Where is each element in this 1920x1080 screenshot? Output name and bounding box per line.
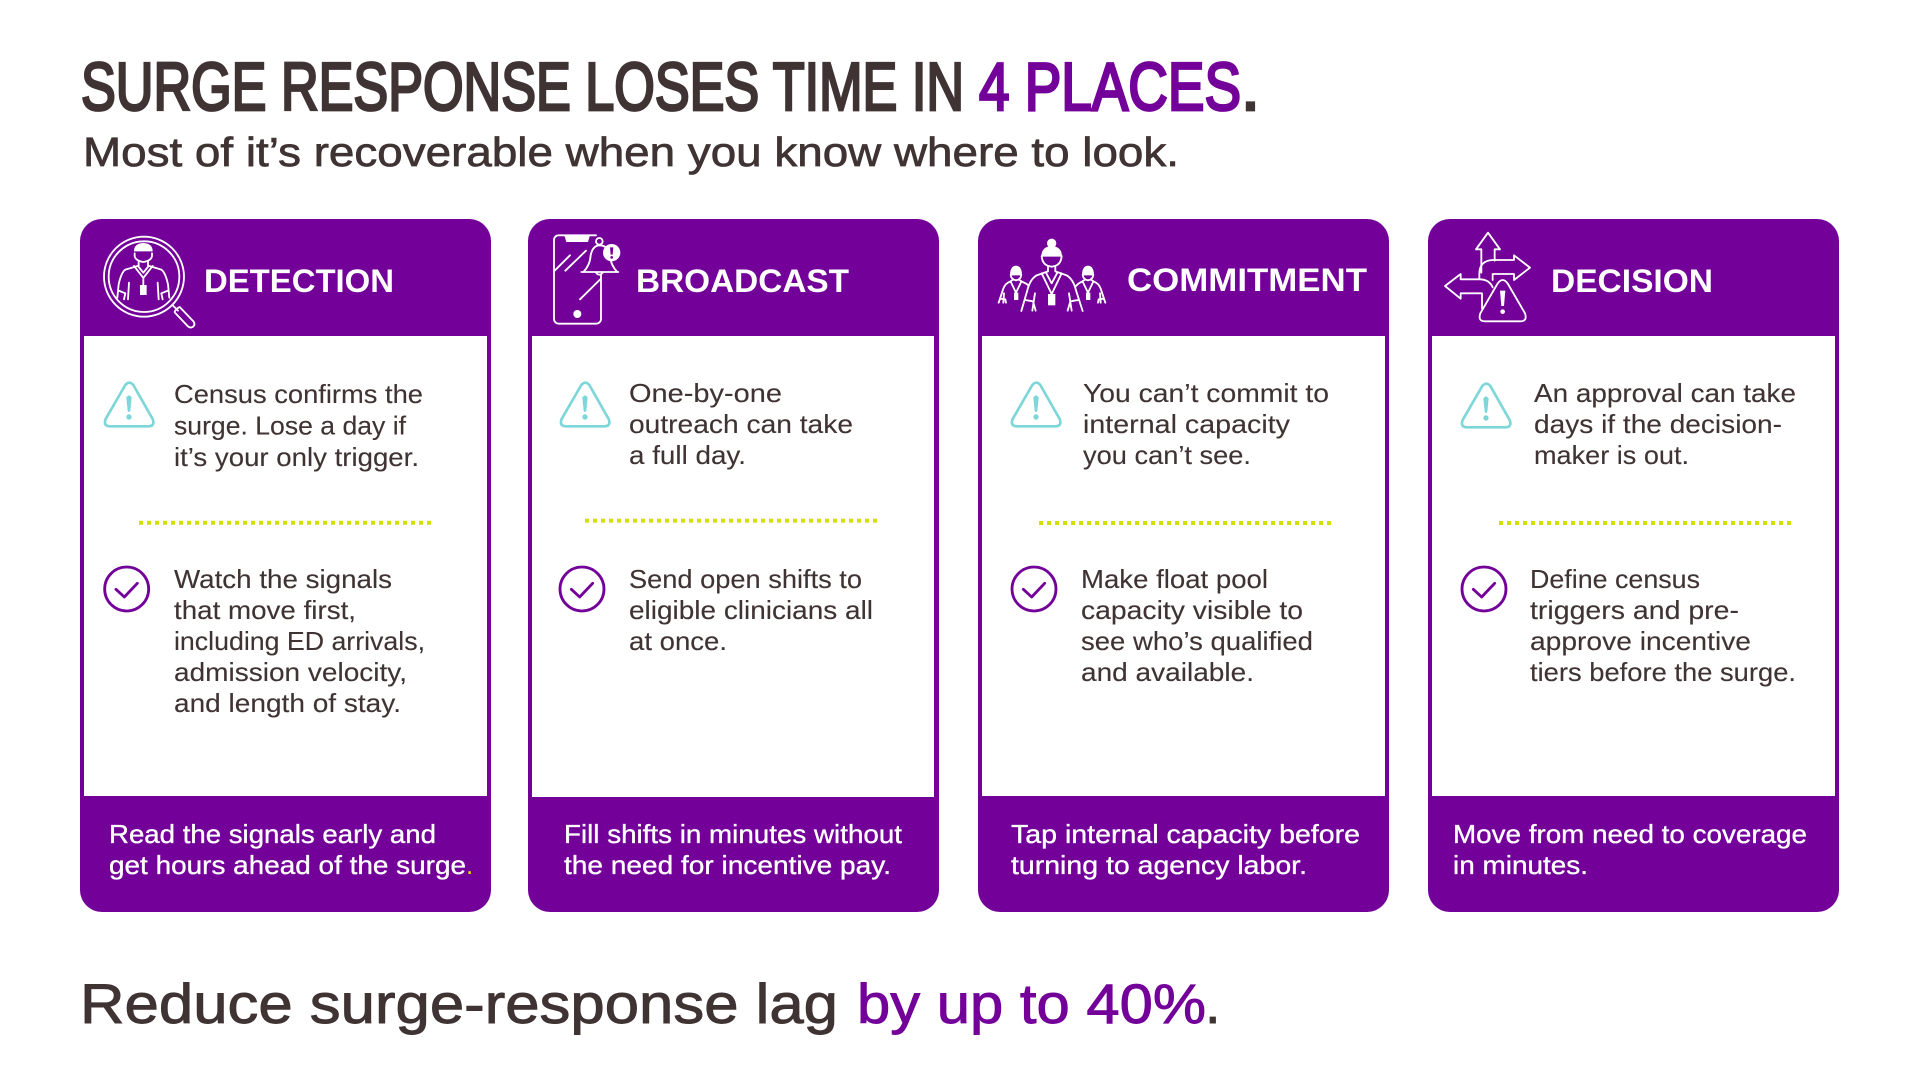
title: SURGE RESPONSE LOSES TIME IN <box>81 49 964 125</box>
solution text: detection: that move first, <box>174 595 356 625</box>
solution text: decision <box>1530 564 1796 687</box>
icon: warning triangle <box>561 383 609 426</box>
footer text: detection: Read the signals early and <box>109 819 436 849</box>
closing statement <box>80 972 1221 1035</box>
title: 4 PLACES <box>979 49 1241 125</box>
title: . <box>1241 49 1260 125</box>
footer text: commitment <box>1011 819 1360 880</box>
problem text: broadcast: outreach can take <box>629 409 853 439</box>
subtitle: Most of it’s recoverable when you know where to look. <box>83 129 1179 175</box>
solution text: commitment: and available. <box>1081 657 1254 687</box>
icon: diverging arrows with warning <box>1445 233 1530 321</box>
solution text: detection: and length of stay. <box>174 688 401 718</box>
solution text: commitment: capacity visible to <box>1081 595 1303 625</box>
problem text: detection: it’s your only trigger. <box>174 442 419 472</box>
problem text: commitment: internal capacity <box>1083 409 1290 439</box>
footer text: decision: in minutes. <box>1453 850 1588 880</box>
problem text: broadcast: a full day. <box>629 440 746 470</box>
panel: broadcast <box>528 219 939 912</box>
heading: detection: DETECTION <box>204 263 394 299</box>
solution text: decision: Define census <box>1530 564 1700 594</box>
solution text: decision: approve incentive <box>1530 626 1751 656</box>
icon: phone with bell <box>554 235 620 324</box>
icon: check circle <box>1462 567 1506 611</box>
panel: detection <box>80 219 491 912</box>
solution text: detection: admission velocity, <box>174 657 407 687</box>
problem text: decision: days if the decision- <box>1534 409 1782 439</box>
icon: check circle <box>1012 567 1056 611</box>
footer text: decision: Move from need to coverage <box>1453 819 1807 849</box>
problem text: decision: An approval can take <box>1534 378 1796 408</box>
problem text: commitment <box>1083 378 1329 470</box>
solution text: detection: including ED arrivals, <box>174 626 425 656</box>
problem text: broadcast: One-by-one <box>629 378 782 408</box>
problem text: broadcast <box>629 378 853 470</box>
solution text: commitment <box>1081 564 1313 687</box>
footer text: broadcast: the need for incentive pay. <box>564 850 891 880</box>
problem text: decision <box>1534 378 1796 470</box>
problem text: commitment: you can’t see. <box>1083 440 1251 470</box>
panel: decision <box>1428 219 1839 912</box>
solution text: detection: Watch the signals <box>174 564 392 594</box>
solution text: broadcast <box>629 564 873 656</box>
footer text: commitment: turning to agency labor. <box>1011 850 1307 880</box>
heading: commitment: COMMITMENT <box>1127 262 1367 298</box>
solution text: detection <box>174 564 425 718</box>
footer text: detection <box>109 819 473 880</box>
footer text: broadcast <box>564 819 903 880</box>
solution text: decision: triggers and pre- <box>1530 595 1739 625</box>
icon: warning triangle <box>105 383 153 426</box>
icon: check circle <box>105 567 149 611</box>
icon: warning triangle <box>1462 384 1510 427</box>
solution text: decision: tiers before the surge. <box>1530 657 1796 687</box>
footer text: broadcast: Fill shifts in minutes without <box>564 819 903 849</box>
heading: broadcast: BROADCAST <box>636 263 849 299</box>
icon: check circle <box>560 567 604 611</box>
icon: magnifier over clinician <box>104 237 194 328</box>
closing statement: Reduce surge-response lag <box>80 972 838 1035</box>
solution text: broadcast: at once. <box>629 626 727 656</box>
problem text: decision: maker is out. <box>1534 440 1689 470</box>
problem text: detection: Census confirms the <box>174 379 423 409</box>
footer text: decision <box>1453 819 1807 880</box>
panel: commitment <box>978 219 1389 912</box>
icon: warning triangle <box>1012 383 1060 426</box>
closing statement: by up to 40% <box>857 972 1206 1035</box>
footer text: detection: . <box>466 850 473 880</box>
solution text: commitment: Make float pool <box>1081 564 1268 594</box>
problem text: commitment: You can’t commit to <box>1083 378 1329 408</box>
solution text: broadcast: eligible clinicians all <box>629 595 873 625</box>
solution text: broadcast: Send open shifts to <box>629 564 862 594</box>
icon: three clinicians <box>999 239 1105 311</box>
solution text: commitment: see who’s qualified <box>1081 626 1313 656</box>
footer text: commitment: Tap internal capacity before <box>1011 819 1360 849</box>
problem text: detection: surge. Lose a day if <box>174 410 407 440</box>
closing statement: . <box>1205 972 1221 1035</box>
footer text: detection: get hours ahead of the surge <box>109 850 466 880</box>
problem text: detection <box>174 379 423 472</box>
heading: decision: DECISION <box>1551 263 1713 299</box>
